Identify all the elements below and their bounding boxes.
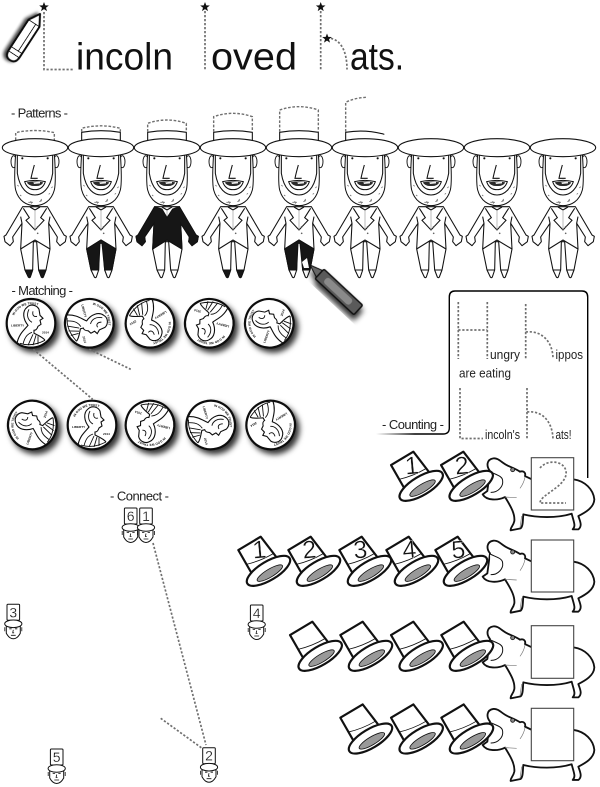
head 1: 1	[142, 508, 150, 524]
coin top 3: LIBERTY	[153, 310, 167, 320]
panel: counting row 2	[238, 535, 594, 613]
coin bottom 2: LIBERTY	[72, 425, 86, 429]
icon: crayon	[306, 260, 363, 315]
head 6	[122, 508, 139, 542]
hat 2: 2	[454, 451, 470, 481]
title	[39, 2, 404, 78]
hat 1: 1	[404, 451, 420, 481]
coin bottom 5: IN GOD WE TRUST	[274, 424, 292, 446]
coin top 3	[124, 298, 184, 358]
panel: counting instructions	[376, 291, 588, 478]
figure 6	[332, 97, 398, 278]
hat 1	[391, 451, 447, 507]
panel: matching coins	[4, 297, 304, 459]
head 4	[248, 605, 265, 640]
coin top 5	[242, 298, 303, 358]
hat 3: 3	[352, 535, 368, 565]
word: oved: oved	[211, 36, 297, 78]
word: incoln: incoln	[76, 36, 173, 78]
coin top 2: LIBERTY	[80, 304, 88, 319]
coin top 3: 2014	[129, 319, 137, 326]
heading: Patterns: - Patterns -	[11, 106, 68, 120]
hippo	[483, 458, 594, 530]
coin top 4: IN GOD WE TRUST	[197, 336, 226, 344]
coin top 2	[63, 298, 123, 358]
head 2	[200, 748, 218, 782]
head 4: 4	[253, 605, 261, 621]
connecting dotted lines	[153, 543, 206, 748]
hippo	[483, 626, 594, 698]
coin bottom 2: 2014	[103, 432, 110, 436]
hat 2	[340, 622, 396, 677]
coin bottom 3: 2014	[134, 410, 142, 415]
hat 4	[441, 622, 497, 677]
tracing guide: L	[44, 12, 74, 70]
head 1	[137, 508, 155, 542]
panel: counting row 3	[290, 622, 594, 698]
text: ungry: ungry	[490, 348, 521, 362]
figure 3	[134, 120, 200, 278]
answer box	[531, 540, 574, 592]
coin top 5: IN GOD WE TRUST	[248, 310, 256, 338]
hat 3	[441, 704, 497, 759]
text: ats!: ats!	[556, 428, 572, 442]
head 2: 2	[205, 748, 213, 764]
figure 8	[464, 139, 530, 278]
figure 4	[200, 113, 266, 278]
tracing star: L	[39, 2, 49, 11]
coin bottom 4	[184, 399, 244, 459]
hat 2	[441, 451, 497, 507]
heading: Counting: - Counting -	[382, 417, 444, 432]
tracing star: h arch	[322, 34, 332, 43]
matching dotted lines	[33, 349, 131, 399]
hat 3	[391, 622, 447, 677]
coin top 1: 2014	[42, 330, 49, 334]
figure 1	[2, 130, 68, 278]
coin top 5: 2014	[280, 309, 286, 317]
coin top 1: LIBERTY	[11, 323, 25, 327]
tracing guide: l	[204, 11, 206, 70]
tracing star: h top	[316, 2, 326, 11]
coin top 3: IN GOD WE TRUST	[153, 322, 171, 344]
coin bottom 1: LIBERTY	[25, 430, 34, 445]
figure 9	[530, 139, 596, 278]
coin top 2: IN GOD WE TRUST	[92, 302, 110, 326]
hippo	[483, 541, 594, 613]
coin bottom 3: IN GOD WE TRUST	[138, 437, 166, 446]
hat 3	[339, 535, 395, 592]
icon: pencil	[5, 10, 45, 64]
answer box	[531, 708, 574, 761]
hat 4	[386, 535, 442, 592]
heading: Matching: - Matching -	[12, 283, 73, 298]
hat 1: 1	[251, 535, 267, 565]
coin bottom 2	[66, 399, 126, 459]
head 5	[48, 749, 65, 784]
coin bottom 5: LIBERTY	[274, 412, 288, 422]
answer box	[531, 626, 574, 678]
figure 5	[266, 107, 332, 278]
panel: counting row 1	[391, 451, 594, 530]
coin bottom 4: IN GOD WE TRUST	[214, 404, 232, 428]
head 3: 3	[9, 604, 17, 620]
coin bottom 4: 2014	[203, 437, 209, 445]
coin bottom 1: 2014	[43, 410, 49, 418]
tracing guides	[458, 302, 553, 440]
hat 4: 4	[401, 535, 418, 565]
hat 1	[340, 704, 396, 759]
coin top 4: LIBERTY	[215, 321, 230, 328]
coin bottom 5	[244, 399, 304, 459]
text: are eating: are eating	[459, 366, 511, 380]
hat 1	[290, 622, 346, 677]
head 3	[5, 604, 22, 639]
coin top 1	[4, 297, 64, 358]
tracing guide: h	[321, 11, 347, 70]
panel: connect the dots	[5, 508, 265, 784]
hat 2	[391, 704, 447, 759]
hat 1	[238, 535, 294, 592]
hat 2: 2	[301, 535, 317, 565]
text: incoln's: incoln's	[485, 428, 520, 442]
coin bottom 1: IN GOD WE TRUST	[11, 411, 19, 440]
word: ats.: ats.	[350, 36, 404, 78]
figure 2	[68, 126, 134, 278]
figure 7	[398, 139, 464, 278]
panel: counting row 4	[340, 704, 594, 781]
coin bottom 3: LIBERTY	[156, 423, 170, 430]
hat 5: 5	[450, 535, 466, 565]
coin bottom 3	[124, 399, 184, 459]
head 5: 5	[53, 749, 61, 765]
hat 2	[288, 535, 344, 592]
answer box with traced 2	[531, 458, 574, 510]
coin top 2: 2014	[82, 336, 87, 344]
coin top 4	[183, 298, 243, 358]
tracing star: l	[200, 2, 210, 11]
hippo	[483, 709, 594, 781]
coin top 1: IN GOD WE TRUST	[12, 302, 38, 316]
text: ippos: ippos	[556, 348, 583, 362]
coin bottom 2: IN GOD WE TRUST	[73, 404, 100, 417]
coin top 5: LIBERTY	[262, 329, 271, 343]
coin bottom 1	[6, 399, 66, 459]
hat 5	[435, 535, 491, 592]
coin bottom 4: LIBERTY	[202, 406, 209, 420]
heading: Connect: - Connect -	[110, 488, 169, 504]
panel outline	[376, 291, 588, 478]
coin bottom 5: 2014	[249, 421, 258, 428]
coin top 4: 2014	[194, 308, 202, 314]
panel: patterns row of Lincolns	[2, 97, 596, 278]
head 6: 6	[127, 508, 135, 524]
